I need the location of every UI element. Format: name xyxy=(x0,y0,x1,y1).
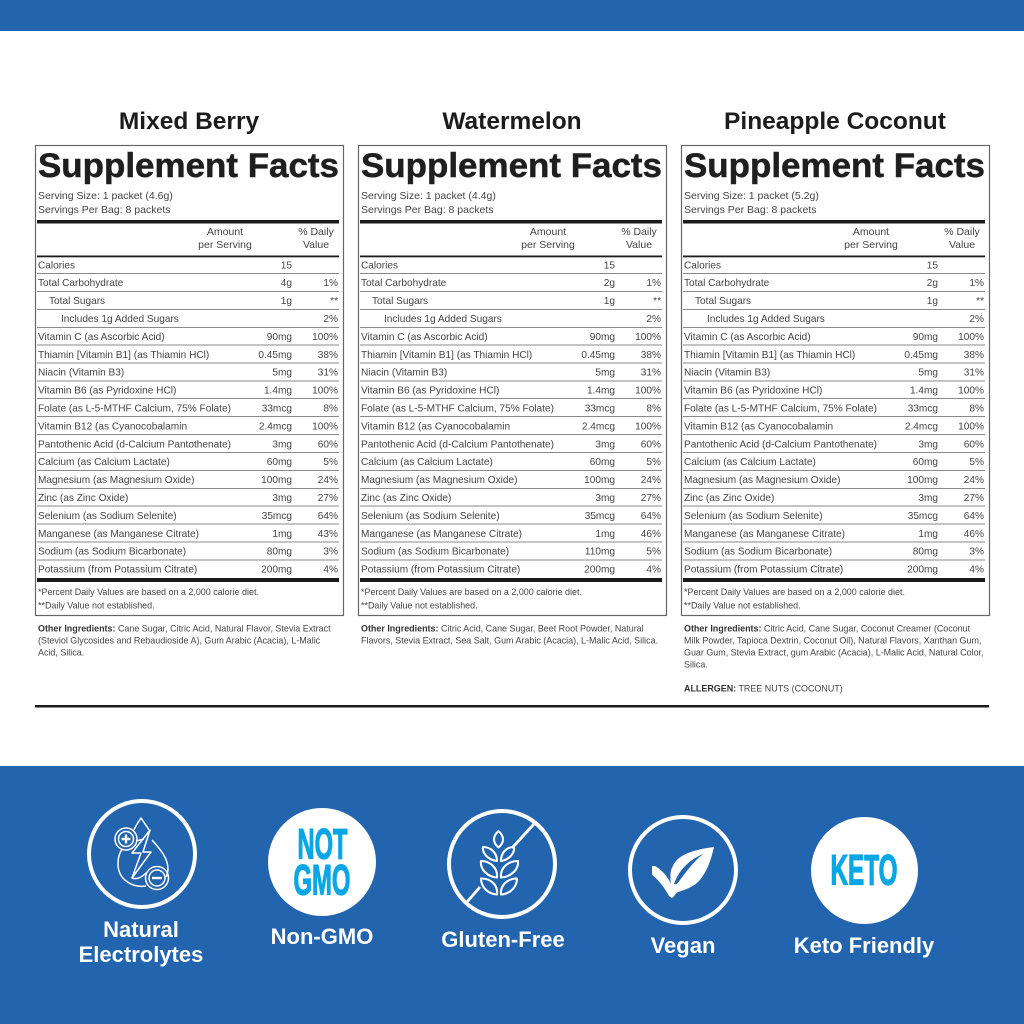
nutrient table: Vitamin B12 (as Cyanocobalamin xyxy=(38,421,187,432)
nutrient table: 2% xyxy=(969,314,984,325)
other ingredients: Guar Gum, Stevia Extract, gum Arabic (Acacia), L-Malic Acid, Natural Color, xyxy=(684,648,984,658)
serving info: Servings Per Bag: 8 packets xyxy=(38,204,170,216)
nutrient table: 2% xyxy=(323,314,338,325)
nutrient table: Folate (as L-5-MTHF Calcium, 75% Folate) xyxy=(38,404,231,414)
nutrient table: 60mg xyxy=(267,457,292,468)
nutrient table: 5mg xyxy=(918,368,938,379)
serving info: Serving Size: 1 packet (4.6g) xyxy=(38,190,173,202)
icon: Not GMO xyxy=(268,808,376,916)
table header: Amount xyxy=(530,226,566,238)
nutrient table: Total Sugars xyxy=(49,296,105,307)
nutrient table: 80mg xyxy=(267,547,292,558)
nutrient table: 38% xyxy=(641,350,661,361)
nutrient table: 100% xyxy=(958,421,984,432)
nutrient table: 90mg xyxy=(590,332,615,343)
nutrient table: Calories xyxy=(684,260,721,271)
nutrient table: 8% xyxy=(323,404,338,414)
nutrient table: Total Carbohydrate xyxy=(684,278,770,289)
nutrient table: 60mg xyxy=(590,457,615,468)
nutrient table: 3% xyxy=(323,547,338,558)
nutrient table: 0.45mg xyxy=(581,350,615,361)
nutrient table: Includes 1g Added Sugars xyxy=(384,314,502,325)
nutrient table: Pantothenic Acid (d-Calcium Pantothenate) xyxy=(684,439,877,450)
nutrient table: 24% xyxy=(964,475,984,486)
nutrient table: 200mg xyxy=(584,565,615,576)
nutrient table: Calcium (as Calcium Lactate) xyxy=(684,457,816,468)
nutrient table: 35mcg xyxy=(585,511,615,522)
nutrient table: 3mg xyxy=(595,439,615,450)
nutrient table: 100% xyxy=(312,421,338,432)
icon: Keto xyxy=(811,817,918,924)
nutrient table xyxy=(37,260,339,576)
nutrient table: 35mcg xyxy=(908,511,938,522)
table header xyxy=(198,226,335,251)
nutrient table: 31% xyxy=(964,368,984,379)
nutrient table: 100mg xyxy=(261,475,292,486)
nutrient table: 3mg xyxy=(595,493,615,504)
nutrient table: Potassium (from Potassium Citrate) xyxy=(38,565,197,576)
nutrient table: 8% xyxy=(969,404,984,414)
nutrient table: Magnesium (as Magnesium Oxide) xyxy=(684,475,841,486)
nutrient table: 35mcg xyxy=(262,511,292,522)
other ingredients: Other Ingredients: Citric Acid, Cane Sugar, Beet Root Powder, Natural xyxy=(361,624,644,634)
nutrient table: Sodium (as Sodium Bicarbonate) xyxy=(684,547,832,558)
nutrient table: 100% xyxy=(635,332,661,343)
nutrient table: Total Sugars xyxy=(695,296,751,307)
nutrient table: 100% xyxy=(635,386,661,397)
label: Natural Electrolytes xyxy=(79,917,203,967)
nutrient table: Thiamin [Vitamin B1] (as Thiamin HCl) xyxy=(38,350,209,361)
nutrient table: 100% xyxy=(958,386,984,397)
other ingredients: (Steviol Glycosides and Rebaudioside A), Gum Arabic (Acacia), L-Malic xyxy=(38,636,321,646)
label: Natural Electrolytes: Natural xyxy=(103,917,179,942)
nutrient table: 3mg xyxy=(272,439,292,450)
nutrient table: 1.4mg xyxy=(910,386,938,397)
icon: Not GMO: NOT xyxy=(298,820,348,868)
nutrient table: Folate (as L-5-MTHF Calcium, 75% Folate) xyxy=(684,404,877,414)
label: Non-GMO: Non-GMO xyxy=(271,924,373,949)
nutrient table: 100% xyxy=(312,386,338,397)
nutrient table: Thiamin [Vitamin B1] (as Thiamin HCl) xyxy=(684,350,855,361)
nutrient table: 110mg xyxy=(585,547,615,558)
nutrient table: 100% xyxy=(958,332,984,343)
icon: Not GMO: GMO xyxy=(294,856,350,904)
nutrient table: 1mg xyxy=(918,529,938,540)
nutrient table: Niacin (Vitamin B3) xyxy=(684,368,770,379)
nutrient table: 5% xyxy=(646,547,661,558)
icon: gluten free xyxy=(449,811,555,917)
footnotes: **Daily Value not established. xyxy=(684,600,801,610)
nutrient table: 90mg xyxy=(913,332,938,343)
nutrient table: 100mg xyxy=(907,475,938,486)
nutrient table: 3mg xyxy=(918,493,938,504)
nutrient table: Includes 1g Added Sugars xyxy=(707,314,825,325)
nutrient table: Manganese (as Manganese Citrate) xyxy=(361,529,522,540)
table header: % Daily xyxy=(298,226,335,238)
nutrient table: Pantothenic Acid (d-Calcium Pantothenate) xyxy=(361,439,554,450)
nutrient table: 31% xyxy=(641,368,661,379)
nutrient table: 33mcg xyxy=(585,404,615,414)
nutrient table: Vitamin B6 (as Pyridoxine HCl) xyxy=(361,386,499,397)
nutrient table: Vitamin B12 (as Cyanocobalamin xyxy=(361,421,510,432)
panel title: Supplement Facts xyxy=(38,147,339,185)
table header xyxy=(844,226,981,251)
nutrient table: 60% xyxy=(964,439,984,450)
heading: Watermelon: Watermelon xyxy=(442,108,582,135)
nutrient table: 38% xyxy=(318,350,338,361)
other ingredients xyxy=(684,624,984,670)
nutrient table: 5% xyxy=(969,457,984,468)
nutrient table xyxy=(360,260,662,576)
table header: Amount xyxy=(207,226,243,238)
nutrient table: 2.4mcg xyxy=(905,421,938,432)
nutrient table: 1.4mg xyxy=(587,386,615,397)
nutrient table: ** xyxy=(330,296,338,307)
table header: Amount xyxy=(853,226,889,238)
nutrient table: 0.45mg xyxy=(258,350,292,361)
nutrient table: Calories xyxy=(361,260,398,271)
nutrient table: 60% xyxy=(318,439,338,450)
nutrient table: 4g xyxy=(281,278,292,289)
nutrient table: 200mg xyxy=(261,565,292,576)
nutrient table: 2% xyxy=(646,314,661,325)
nutrient table: Total Carbohydrate xyxy=(38,278,124,289)
nutrient table xyxy=(683,260,985,576)
footnotes xyxy=(38,587,259,610)
other ingredients xyxy=(361,624,658,646)
nutrient table: 27% xyxy=(964,493,984,504)
panel title: Supplement Facts xyxy=(684,147,985,185)
nutrient table: Thiamin [Vitamin B1] (as Thiamin HCl) xyxy=(361,350,532,361)
top blue band xyxy=(0,0,1024,31)
table header: Value xyxy=(949,239,975,251)
nutrient table: 2g xyxy=(927,278,938,289)
nutrient table: 0.45mg xyxy=(904,350,938,361)
nutrient table: Pantothenic Acid (d-Calcium Pantothenate) xyxy=(38,439,231,450)
footnotes: **Daily Value not established. xyxy=(38,600,155,610)
other ingredients: Other Ingredients: Cane Sugar, Citric Acid, Natural Flavor, Stevia Extract xyxy=(38,624,331,634)
nutrient table: 64% xyxy=(641,511,661,522)
nutrient table: 4% xyxy=(646,565,661,576)
nutrient table: 24% xyxy=(641,475,661,486)
nutrient table: 1g xyxy=(604,296,615,307)
nutrient table: Selenium (as Sodium Selenite) xyxy=(684,511,823,522)
table header: Value xyxy=(626,239,652,251)
nutrient table: Sodium (as Sodium Bicarbonate) xyxy=(361,547,509,558)
nutrient table: Zinc (as Zinc Oxide) xyxy=(684,493,774,504)
nutrient table: Calcium (as Calcium Lactate) xyxy=(38,457,170,468)
nutrient table: 100mg xyxy=(584,475,615,486)
nutrient table: 33mcg xyxy=(262,404,292,414)
nutrient table: 46% xyxy=(641,529,661,540)
serving info xyxy=(361,190,496,216)
allergen note: ALLERGEN: TREE NUTS (COCONUT) xyxy=(684,684,843,694)
nutrient table: Manganese (as Manganese Citrate) xyxy=(684,529,845,540)
label: Vegan: Vegan xyxy=(651,933,715,958)
nutrient table: 3mg xyxy=(272,493,292,504)
table header: % Daily xyxy=(621,226,658,238)
nutrient table: 4% xyxy=(969,565,984,576)
nutrient table: Magnesium (as Magnesium Oxide) xyxy=(38,475,195,486)
panel: Watermelon supplement facts xyxy=(358,146,666,646)
nutrient table: 60mg xyxy=(913,457,938,468)
nutrient table: 8% xyxy=(646,404,661,414)
nutrient table: 1.4mg xyxy=(264,386,292,397)
table header: per Serving xyxy=(844,239,898,251)
nutrient table: Calcium (as Calcium Lactate) xyxy=(361,457,493,468)
heading: Pineapple Coconut: Pineapple Coconut xyxy=(724,108,946,135)
nutrient table: 60% xyxy=(641,439,661,450)
nutrient table: 2.4mcg xyxy=(259,421,292,432)
nutrient table: 80mg xyxy=(913,547,938,558)
nutrient table: 1% xyxy=(646,278,661,289)
footnotes: **Daily Value not established. xyxy=(361,600,478,610)
nutrient table: Includes 1g Added Sugars xyxy=(61,314,179,325)
nutrient table: 27% xyxy=(641,493,661,504)
nutrient table: Magnesium (as Magnesium Oxide) xyxy=(361,475,518,486)
label: Gluten-Free: Gluten-Free xyxy=(441,927,565,952)
nutrient table: 5% xyxy=(646,457,661,468)
nutrient table: 15 xyxy=(281,260,292,271)
nutrient table: 33mcg xyxy=(908,404,938,414)
footnotes xyxy=(361,587,582,610)
nutrient table: 15 xyxy=(604,260,615,271)
nutrient table: Niacin (Vitamin B3) xyxy=(38,368,124,379)
nutrient table: 5% xyxy=(323,457,338,468)
nutrient table: 2g xyxy=(604,278,615,289)
nutrient table: 200mg xyxy=(907,565,938,576)
footnotes: *Percent Daily Values are based on a 2,000 calorie diet. xyxy=(361,587,582,597)
nutrient table: 43% xyxy=(318,529,338,540)
nutrient table: Manganese (as Manganese Citrate) xyxy=(38,529,199,540)
nutrient table: 64% xyxy=(964,511,984,522)
table header xyxy=(521,226,658,251)
icon: Keto: KETO xyxy=(830,846,898,894)
nutrient table: ** xyxy=(976,296,984,307)
nutrient table: Selenium (as Sodium Selenite) xyxy=(38,511,177,522)
nutrient table: Vitamin C (as Ascorbic Acid) xyxy=(684,332,811,343)
serving info: Servings Per Bag: 8 packets xyxy=(361,204,494,216)
nutrient table: Selenium (as Sodium Selenite) xyxy=(361,511,500,522)
nutrient table: Folate (as L-5-MTHF Calcium, 75% Folate) xyxy=(361,404,554,414)
label: Keto Friendly: Keto Friendly xyxy=(794,933,935,958)
footnotes: *Percent Daily Values are based on a 2,000 calorie diet. xyxy=(38,587,259,597)
serving info xyxy=(38,190,173,216)
nutrient table: 1g xyxy=(281,296,292,307)
panel: Mixed Berry supplement facts xyxy=(36,146,344,658)
nutrient table: Vitamin C (as Ascorbic Acid) xyxy=(38,332,165,343)
other ingredients: Silica. xyxy=(684,660,708,670)
nutrient table: Total Carbohydrate xyxy=(361,278,447,289)
nutrient table: 31% xyxy=(318,368,338,379)
nutrient table: 24% xyxy=(318,475,338,486)
nutrient table: 3% xyxy=(969,547,984,558)
nutrient table: ** xyxy=(653,296,661,307)
nutrient table: 100% xyxy=(635,421,661,432)
bottom blue benefits band xyxy=(0,766,1024,1024)
other ingredients: Other Ingredients: Citric Acid, Cane Sugar, Coconut Creamer (Coconut xyxy=(684,624,971,634)
nutrient table: 64% xyxy=(318,511,338,522)
nutrient table: Vitamin C (as Ascorbic Acid) xyxy=(361,332,488,343)
icon: vegan check leaf xyxy=(630,817,736,923)
nutrient table: 5mg xyxy=(595,368,615,379)
nutrient table: 38% xyxy=(964,350,984,361)
nutrient table: Zinc (as Zinc Oxide) xyxy=(38,493,128,504)
panel: Pineapple Coconut supplement facts xyxy=(682,146,990,694)
table header: per Serving xyxy=(521,239,575,251)
nutrient table: 4% xyxy=(323,565,338,576)
nutrient table: Potassium (from Potassium Citrate) xyxy=(684,565,843,576)
nutrient table: 5mg xyxy=(272,368,292,379)
nutrient table: 1% xyxy=(323,278,338,289)
nutrient table: Calories xyxy=(38,260,75,271)
nutrient table: Sodium (as Sodium Bicarbonate) xyxy=(38,547,186,558)
other ingredients: Flavors, Stevia Extract, Sea Salt, Gum Arabic (Acacia), L-Malic Acid, Silica. xyxy=(361,636,658,646)
nutrient table: 27% xyxy=(318,493,338,504)
nutrient table: Vitamin B6 (as Pyridoxine HCl) xyxy=(684,386,822,397)
serving info xyxy=(684,190,819,216)
panel title: Supplement Facts xyxy=(361,147,662,185)
nutrient table: Zinc (as Zinc Oxide) xyxy=(361,493,451,504)
table header: % Daily xyxy=(944,226,981,238)
serving info: Serving Size: 1 packet (5.2g) xyxy=(684,190,819,202)
serving info: Serving Size: 1 packet (4.4g) xyxy=(361,190,496,202)
nutrient table: 100% xyxy=(312,332,338,343)
other ingredients: Acid, Silica. xyxy=(38,648,84,658)
table header: Value xyxy=(303,239,329,251)
nutrient table: 1mg xyxy=(595,529,615,540)
icon: natural electrolytes xyxy=(89,801,195,907)
nutrient table: Vitamin B12 (as Cyanocobalamin xyxy=(684,421,833,432)
nutrient table: 1mg xyxy=(272,529,292,540)
nutrient table: 15 xyxy=(927,260,938,271)
nutrient table: Total Sugars xyxy=(372,296,428,307)
nutrient table: 2.4mcg xyxy=(582,421,615,432)
other ingredients: Milk Powder, Tapioca Dextrin, Coconut Oil), Natural Flavors, Xanthan Gum, xyxy=(684,636,981,646)
table header: per Serving xyxy=(198,239,252,251)
footnotes xyxy=(684,587,905,610)
serving info: Servings Per Bag: 8 packets xyxy=(684,204,816,216)
nutrient table: 3mg xyxy=(918,439,938,450)
nutrient table: Niacin (Vitamin B3) xyxy=(361,368,447,379)
nutrient table: 46% xyxy=(964,529,984,540)
footnotes: *Percent Daily Values are based on a 2,000 calorie diet. xyxy=(684,587,905,597)
other ingredients xyxy=(38,624,331,658)
nutrient table: Vitamin B6 (as Pyridoxine HCl) xyxy=(38,386,176,397)
label: Natural Electrolytes: Electrolytes xyxy=(79,942,203,967)
nutrient table: 1% xyxy=(969,278,984,289)
nutrient table: Potassium (from Potassium Citrate) xyxy=(361,565,520,576)
nutrient table: 1g xyxy=(927,296,938,307)
heading: Mixed Berry: Mixed Berry xyxy=(119,108,259,135)
nutrient table: 90mg xyxy=(267,332,292,343)
